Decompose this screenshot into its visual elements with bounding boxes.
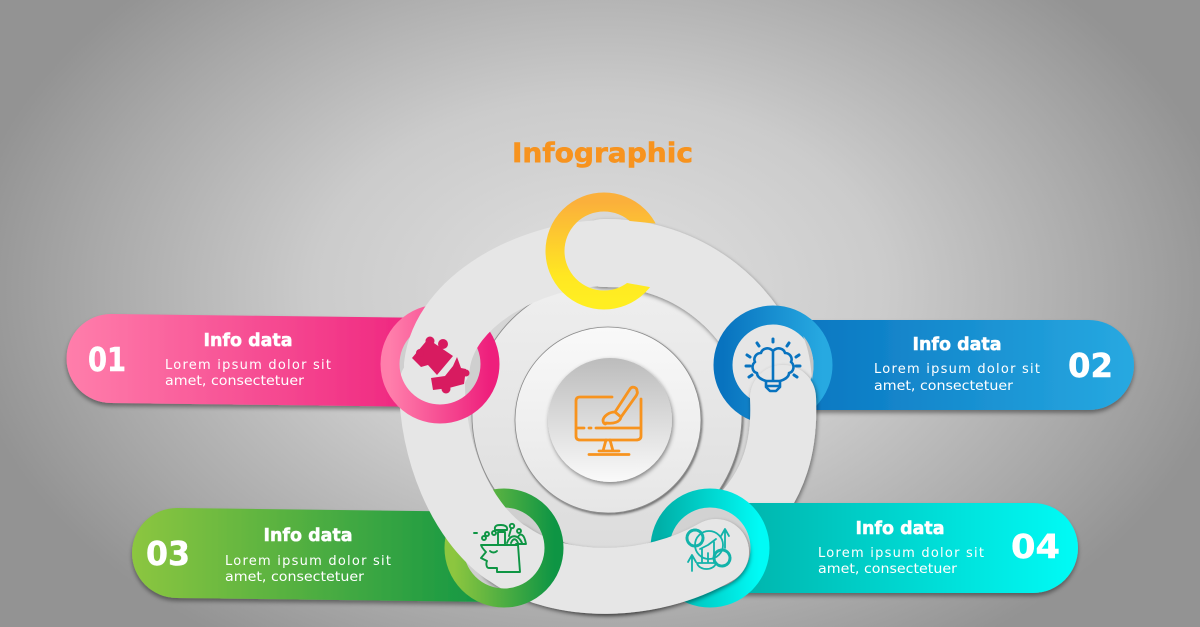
pill 04: Info data — [856, 519, 944, 539]
pill 04 — [720, 503, 1078, 593]
ring: yellow — [555, 202, 653, 300]
icon: brain bulb — [746, 339, 800, 391]
icon: puzzle — [412, 336, 470, 394]
ring shadow: blue interior — [803, 336, 814, 380]
pill 04: 04 — [1011, 527, 1060, 566]
pill 03: 03 — [146, 534, 190, 573]
pill 02: Lorem ipsum dolor sit — [874, 362, 1040, 377]
pill 03 — [132, 508, 500, 602]
ring: teal — [660, 498, 760, 598]
pill 02: Info data — [912, 335, 1002, 355]
pill 03: Info data — [264, 526, 352, 546]
pill 01 — [67, 314, 440, 407]
central disc stack — [412, 223, 802, 613]
pill 04: Lorem ipsum dolor sit — [818, 546, 984, 561]
ring interior: green — [462, 506, 546, 590]
band: lower left — [432, 385, 505, 552]
ring: green — [454, 498, 554, 598]
pill 03: amet, consectetuer — [225, 570, 365, 585]
icon: gears and chart — [687, 529, 730, 571]
icon: head with ideas — [474, 524, 526, 572]
pill 02 — [780, 320, 1134, 410]
pill 01: Lorem ipsum dolor sit — [165, 358, 331, 373]
band: top left — [437, 253, 604, 365]
ring: pink — [390, 314, 490, 414]
ring interior: pink — [398, 322, 482, 406]
icon: monitor with brush — [576, 387, 641, 454]
pill 01: 01 — [88, 340, 126, 379]
pill 02: amet, consectetuer — [874, 379, 1014, 394]
pill 01: Info data — [204, 331, 292, 351]
band: top to right — [604, 253, 778, 390]
pill 04: amet, consectetuer — [818, 562, 958, 577]
pill 02: 02 — [1068, 346, 1113, 385]
band: right side — [735, 398, 783, 525]
ring: blue — [723, 315, 823, 415]
pill 03: Lorem ipsum dolor sit — [225, 554, 391, 569]
pill 01: amet, consectetuer — [165, 374, 305, 389]
title: Infographic — [512, 138, 693, 169]
band: bottom — [510, 552, 716, 581]
